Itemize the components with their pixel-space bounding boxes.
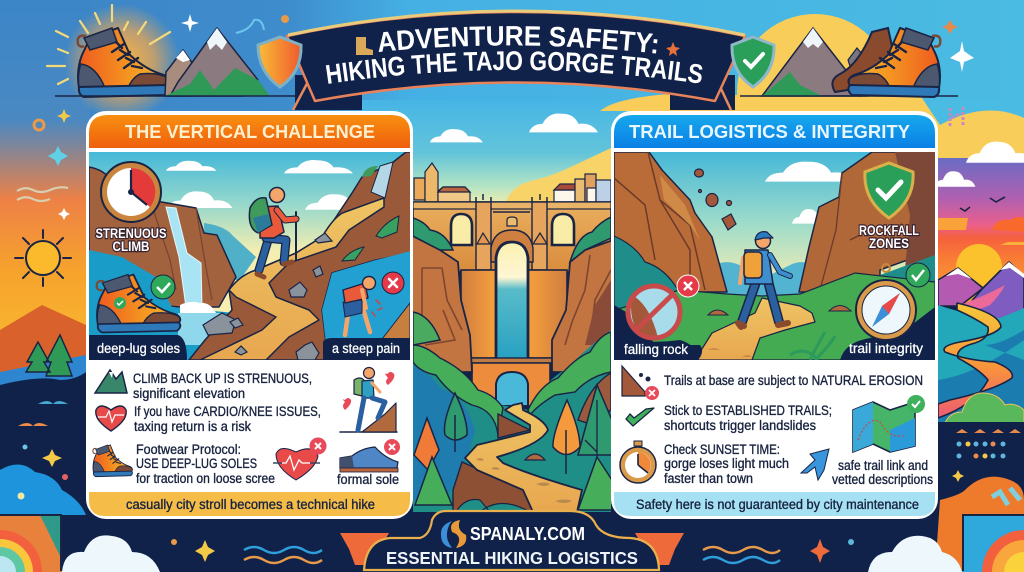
mountains: left	[165, 28, 270, 96]
tab: deep-lug soles: deep-lug soles	[97, 341, 180, 356]
text: footwear protocol	[136, 442, 275, 486]
cloud: bottom right	[868, 536, 962, 572]
panel: trail logistics and integrity	[611, 111, 938, 519]
title banner	[286, 10, 746, 111]
icon: heart	[96, 406, 126, 431]
central illustration: Ronda bridge and gorge	[405, 113, 619, 512]
icon: mountain	[95, 370, 127, 393]
sun icon: left	[15, 230, 71, 286]
illustration: climbing hiker	[89, 152, 415, 360]
illustration: climbing hiker: STRENUOUS	[96, 226, 166, 241]
illustration: climbing hiker: CLIMB	[112, 239, 150, 254]
mountains: right	[762, 28, 875, 96]
compass	[856, 263, 930, 340]
text: established trails: Stick to ESTABLISHED TRAILS;	[664, 403, 832, 418]
pool	[89, 250, 235, 360]
winding trail	[465, 403, 582, 512]
tab: falling rock: falling rock	[624, 342, 688, 357]
text: safe trail link	[832, 458, 933, 487]
falling rocks	[694, 169, 736, 230]
tab: a steep pain: a steep pain	[332, 341, 400, 356]
icon: map	[853, 395, 925, 452]
icon: check mark	[626, 408, 654, 426]
ribbon: right	[635, 533, 684, 565]
back mountain	[204, 223, 256, 280]
boot small	[97, 275, 180, 332]
footer banner	[340, 511, 684, 570]
waterfall	[166, 207, 202, 307]
text: safe trail link: vetted descriptions	[832, 472, 933, 487]
text: natural erosion: Trails at base are subject to NATURAL EROSION	[664, 373, 923, 388]
rocks	[203, 233, 332, 360]
tab: a steep pain	[323, 338, 410, 360]
text: safe trail link: safe trail link and	[838, 458, 928, 473]
icon: boot in title	[356, 37, 373, 55]
icon: formal shoe	[340, 439, 400, 472]
text: sunset time: faster than town	[664, 471, 753, 486]
illustration: walking hiker: ROCKFALL	[859, 223, 919, 238]
no falling rock sign	[627, 275, 699, 339]
shield: green check	[732, 37, 774, 87]
text: sunset time	[664, 442, 789, 486]
cloud: bottom left	[62, 535, 160, 572]
decorations: bottom right	[703, 539, 854, 563]
header: the vertical challenge: THE VERTICAL CHALLENGE	[125, 122, 375, 142]
tab: deep-lug soles	[89, 335, 187, 360]
lower valley	[413, 330, 611, 512]
shield	[865, 163, 913, 218]
hiker	[249, 188, 296, 277]
icon: stopwatch	[620, 441, 656, 483]
icon: arrow	[801, 449, 829, 480]
left cliff	[89, 167, 236, 307]
pool: right	[322, 251, 410, 340]
text: essential hiking logistics: ESSENTIAL HIKING LOGISTICS	[386, 548, 638, 568]
text: climb back up: significant elevation	[133, 386, 245, 401]
trail	[695, 298, 815, 360]
text: cardio knee issues	[134, 404, 321, 434]
footer strip: vertical challenge: casually city stroll becomes a technical hike	[126, 497, 375, 512]
label: formal sole: formal sole	[337, 472, 399, 487]
trees	[444, 393, 467, 440]
plaque	[364, 511, 659, 570]
bridge	[413, 194, 611, 406]
text: climb back up	[133, 371, 312, 401]
footer strip: vertical challenge	[89, 492, 410, 516]
footer strip: trail logistics: Safety here is not guaranteed by city maintenance	[636, 497, 919, 512]
text: footwear protocol: for traction on loose scree	[136, 471, 275, 486]
text: cardio knee issues: If you have CARDIO/KNEE ISSUES,	[134, 404, 321, 419]
hillside and right cliff	[189, 152, 415, 360]
icon: heart warning	[273, 438, 326, 480]
ribbon: left	[340, 533, 389, 565]
boot: right	[832, 28, 940, 97]
far hills	[717, 262, 805, 296]
illustration: walking hiker	[614, 152, 935, 360]
icon: erosion	[622, 366, 659, 400]
left bush	[614, 236, 678, 308]
text: sunset time: gorge loses light much	[664, 456, 789, 471]
rainbow art: bottom left	[0, 515, 62, 572]
text: climb back up: CLIMB BACK UP IS STRENUOUS,	[133, 371, 312, 386]
title banner: HIKING THE TAJO GORGE TRAILS	[326, 51, 702, 84]
footer strip: trail logistics	[614, 492, 935, 516]
tab: trail integrity: trail integrity	[849, 341, 923, 356]
text: cardio knee issues: taxing return is a risk	[134, 419, 251, 434]
right cliff	[798, 152, 910, 293]
header: trail logistics: TRAIL LOGISTICS & INTEGRITY	[629, 122, 910, 142]
rock under trail	[498, 414, 530, 438]
logo	[441, 520, 466, 548]
text: footwear protocol: Footwear Protocol:	[136, 442, 241, 457]
ground	[614, 273, 935, 360]
illustration: walking hiker: ZONES	[869, 236, 909, 251]
text: footwear protocol: USE DEEP-LUG SOLES	[136, 456, 257, 471]
clock	[101, 162, 161, 222]
sun glow and boot: left	[47, 4, 180, 120]
icon: hiker on slope	[340, 368, 397, 432]
shield: orange	[258, 37, 301, 87]
text: established trails	[664, 403, 832, 433]
icon: hiking boot	[93, 445, 132, 477]
header: trail logistics	[614, 115, 935, 148]
hiker	[738, 232, 790, 327]
right side landscape	[935, 20, 1024, 572]
decorations: bottom left	[171, 539, 322, 563]
tab: falling rock	[624, 340, 699, 360]
horizon line: right	[740, 95, 958, 97]
hurting hiker	[343, 272, 404, 335]
cliffs	[413, 237, 473, 373]
sparkles: top left	[17, 14, 289, 220]
text: spanaly.com: SPANALY.COM	[470, 524, 585, 544]
trail	[200, 198, 384, 360]
navy corners	[614, 305, 702, 360]
title text: ADVENTURE SAFETY:	[378, 26, 658, 54]
text: sunset time: Check SUNSET TIME:	[664, 442, 780, 457]
horizon line: left	[55, 95, 295, 97]
town buildings	[414, 163, 611, 202]
text: established trails: shortcuts trigger landslides	[664, 418, 816, 433]
header: the vertical challenge	[89, 115, 410, 148]
rainbow art: bottom right	[935, 477, 1024, 572]
bushes	[413, 218, 453, 250]
panel: the vertical challenge	[86, 111, 415, 519]
landscape: left lower	[0, 305, 86, 572]
left cliff	[614, 152, 727, 292]
